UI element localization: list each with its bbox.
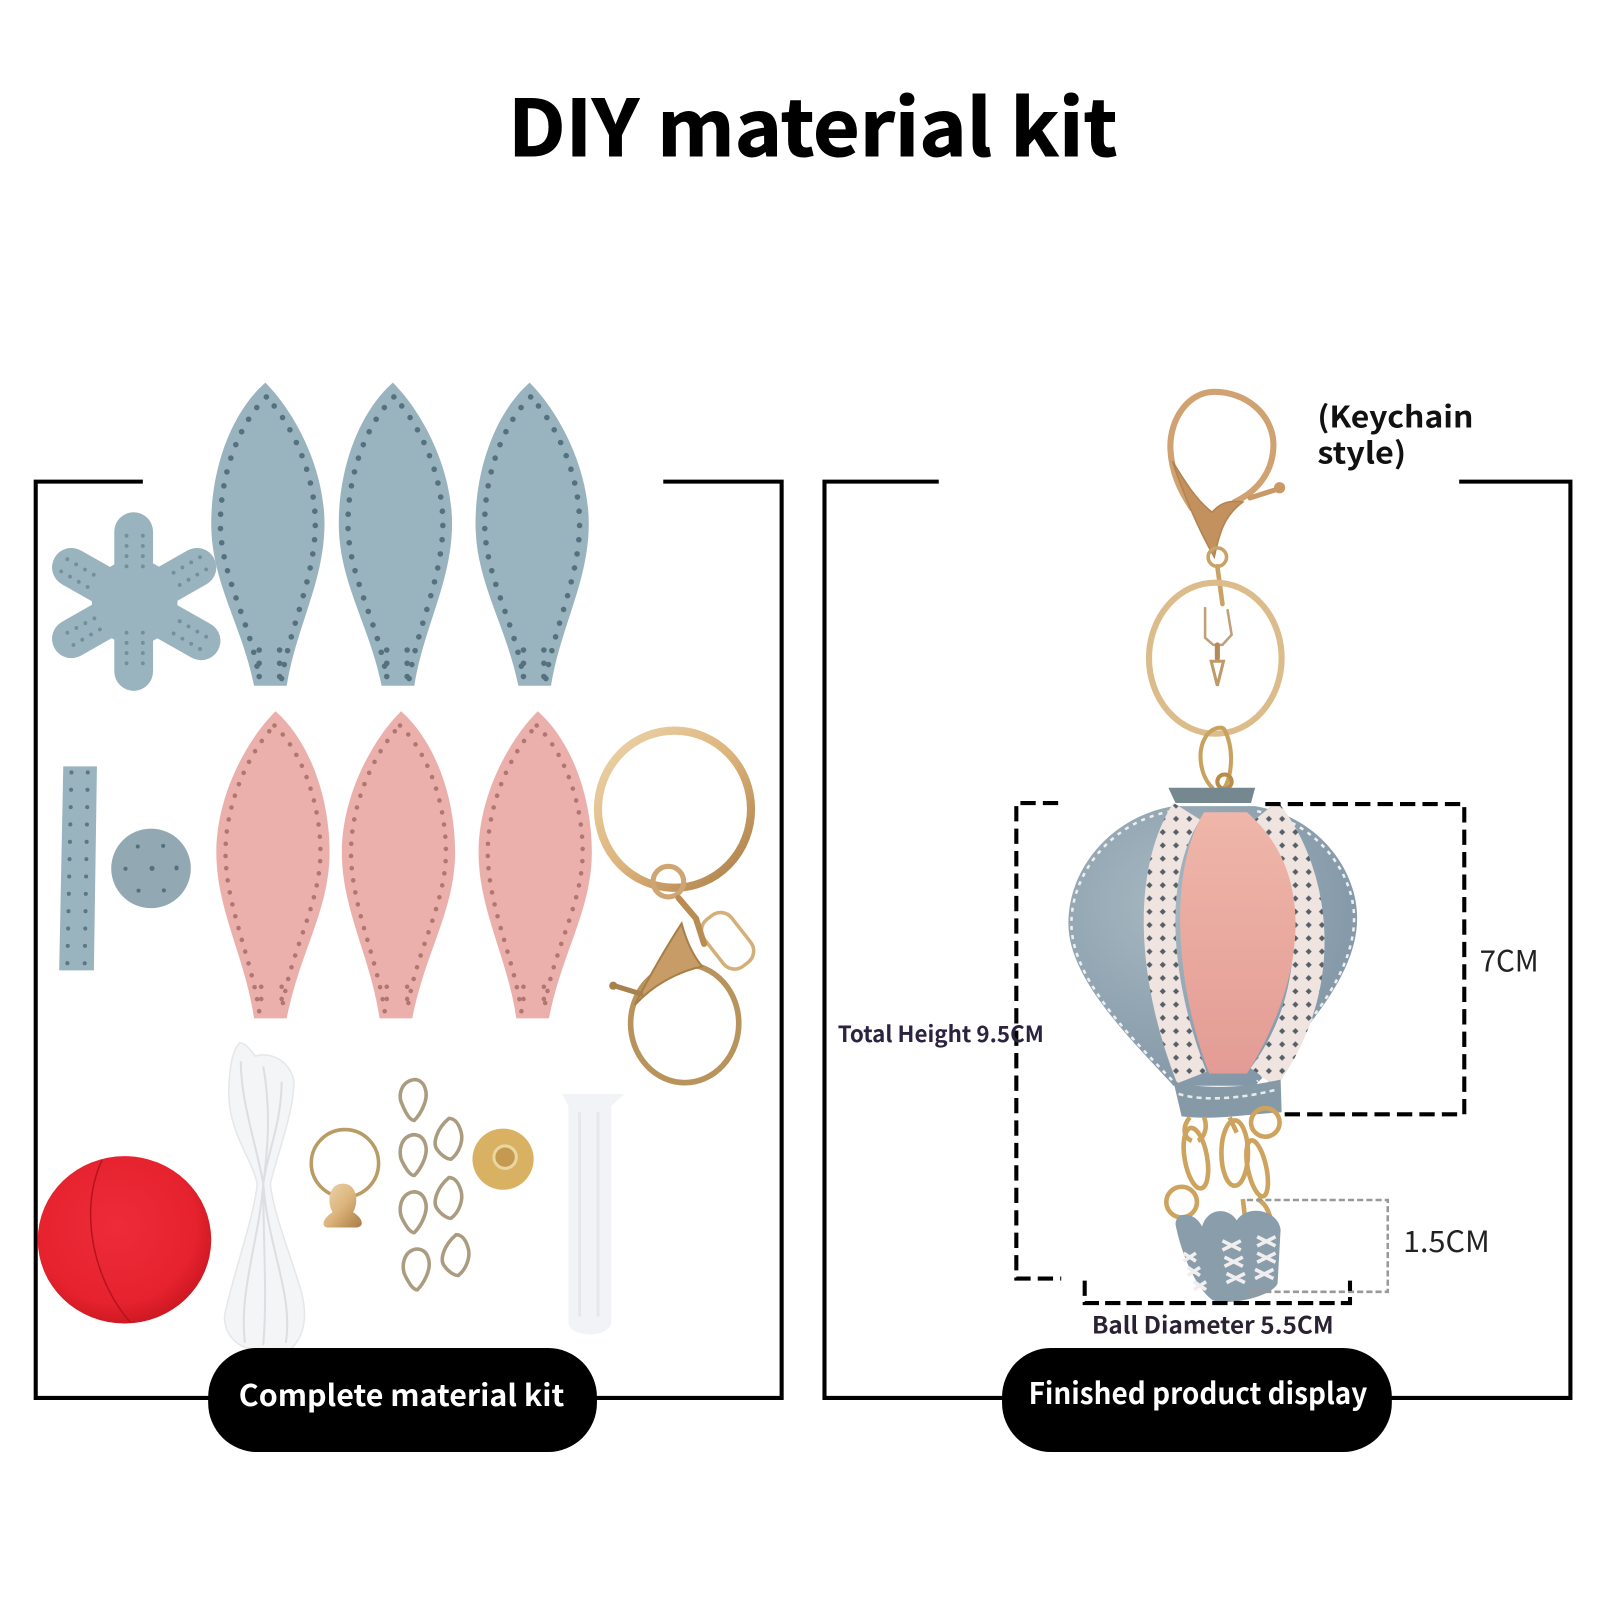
balloon basket: [1176, 1211, 1281, 1302]
keychain label: [1317, 394, 1473, 472]
pill label: finished product display: [1002, 1348, 1392, 1452]
gold magnetic disc: [472, 1129, 534, 1190]
dashed bracket: 7CM: [1265, 804, 1464, 1114]
pill label: finished product display: Finished product display: [1029, 1370, 1367, 1413]
keychain label: style): [1317, 429, 1406, 472]
blue leather petals: [211, 383, 589, 686]
lobster clasp and key ring: [1149, 392, 1285, 789]
label: total height: Total Height 9.5CM: [838, 1017, 1044, 1049]
gold keyring with clasp: [598, 731, 759, 1083]
label: 1.5CM: 1.5CM: [1403, 1218, 1490, 1261]
right frame: [824, 482, 1570, 1398]
title: DIY material kit: [508, 67, 1117, 179]
pink leather petals: [216, 711, 592, 1018]
dashed bracket: ball diameter: [1085, 1281, 1350, 1303]
panel: finished product display: [824, 392, 1570, 1452]
pill label: complete material kit: Complete material kit: [239, 1372, 564, 1415]
blue strip: [59, 766, 97, 970]
blue star base piece: [61, 532, 206, 673]
white cord: [224, 1043, 304, 1349]
left frame: [36, 482, 782, 1398]
red ball: [38, 1156, 211, 1323]
label: ball diameter: Ball Diameter 5.5CM: [1092, 1307, 1334, 1341]
dashed bracket: total height: [1016, 803, 1061, 1279]
dotted bracket: 1.5CM: [1247, 1200, 1388, 1292]
pill label: complete material kit: [208, 1348, 597, 1452]
blue round piece: [111, 829, 191, 908]
balloon chains: [1166, 1108, 1280, 1235]
panel: complete material kit: [36, 383, 782, 1452]
clear glue tube: [562, 1094, 624, 1334]
label: 7CM: 7CM: [1480, 937, 1539, 980]
hot air balloon: [1068, 788, 1357, 1118]
gold ring with stud: [311, 1130, 379, 1228]
small oval jump rings: [400, 1080, 469, 1290]
keychain label: (Keychain: [1317, 394, 1473, 437]
